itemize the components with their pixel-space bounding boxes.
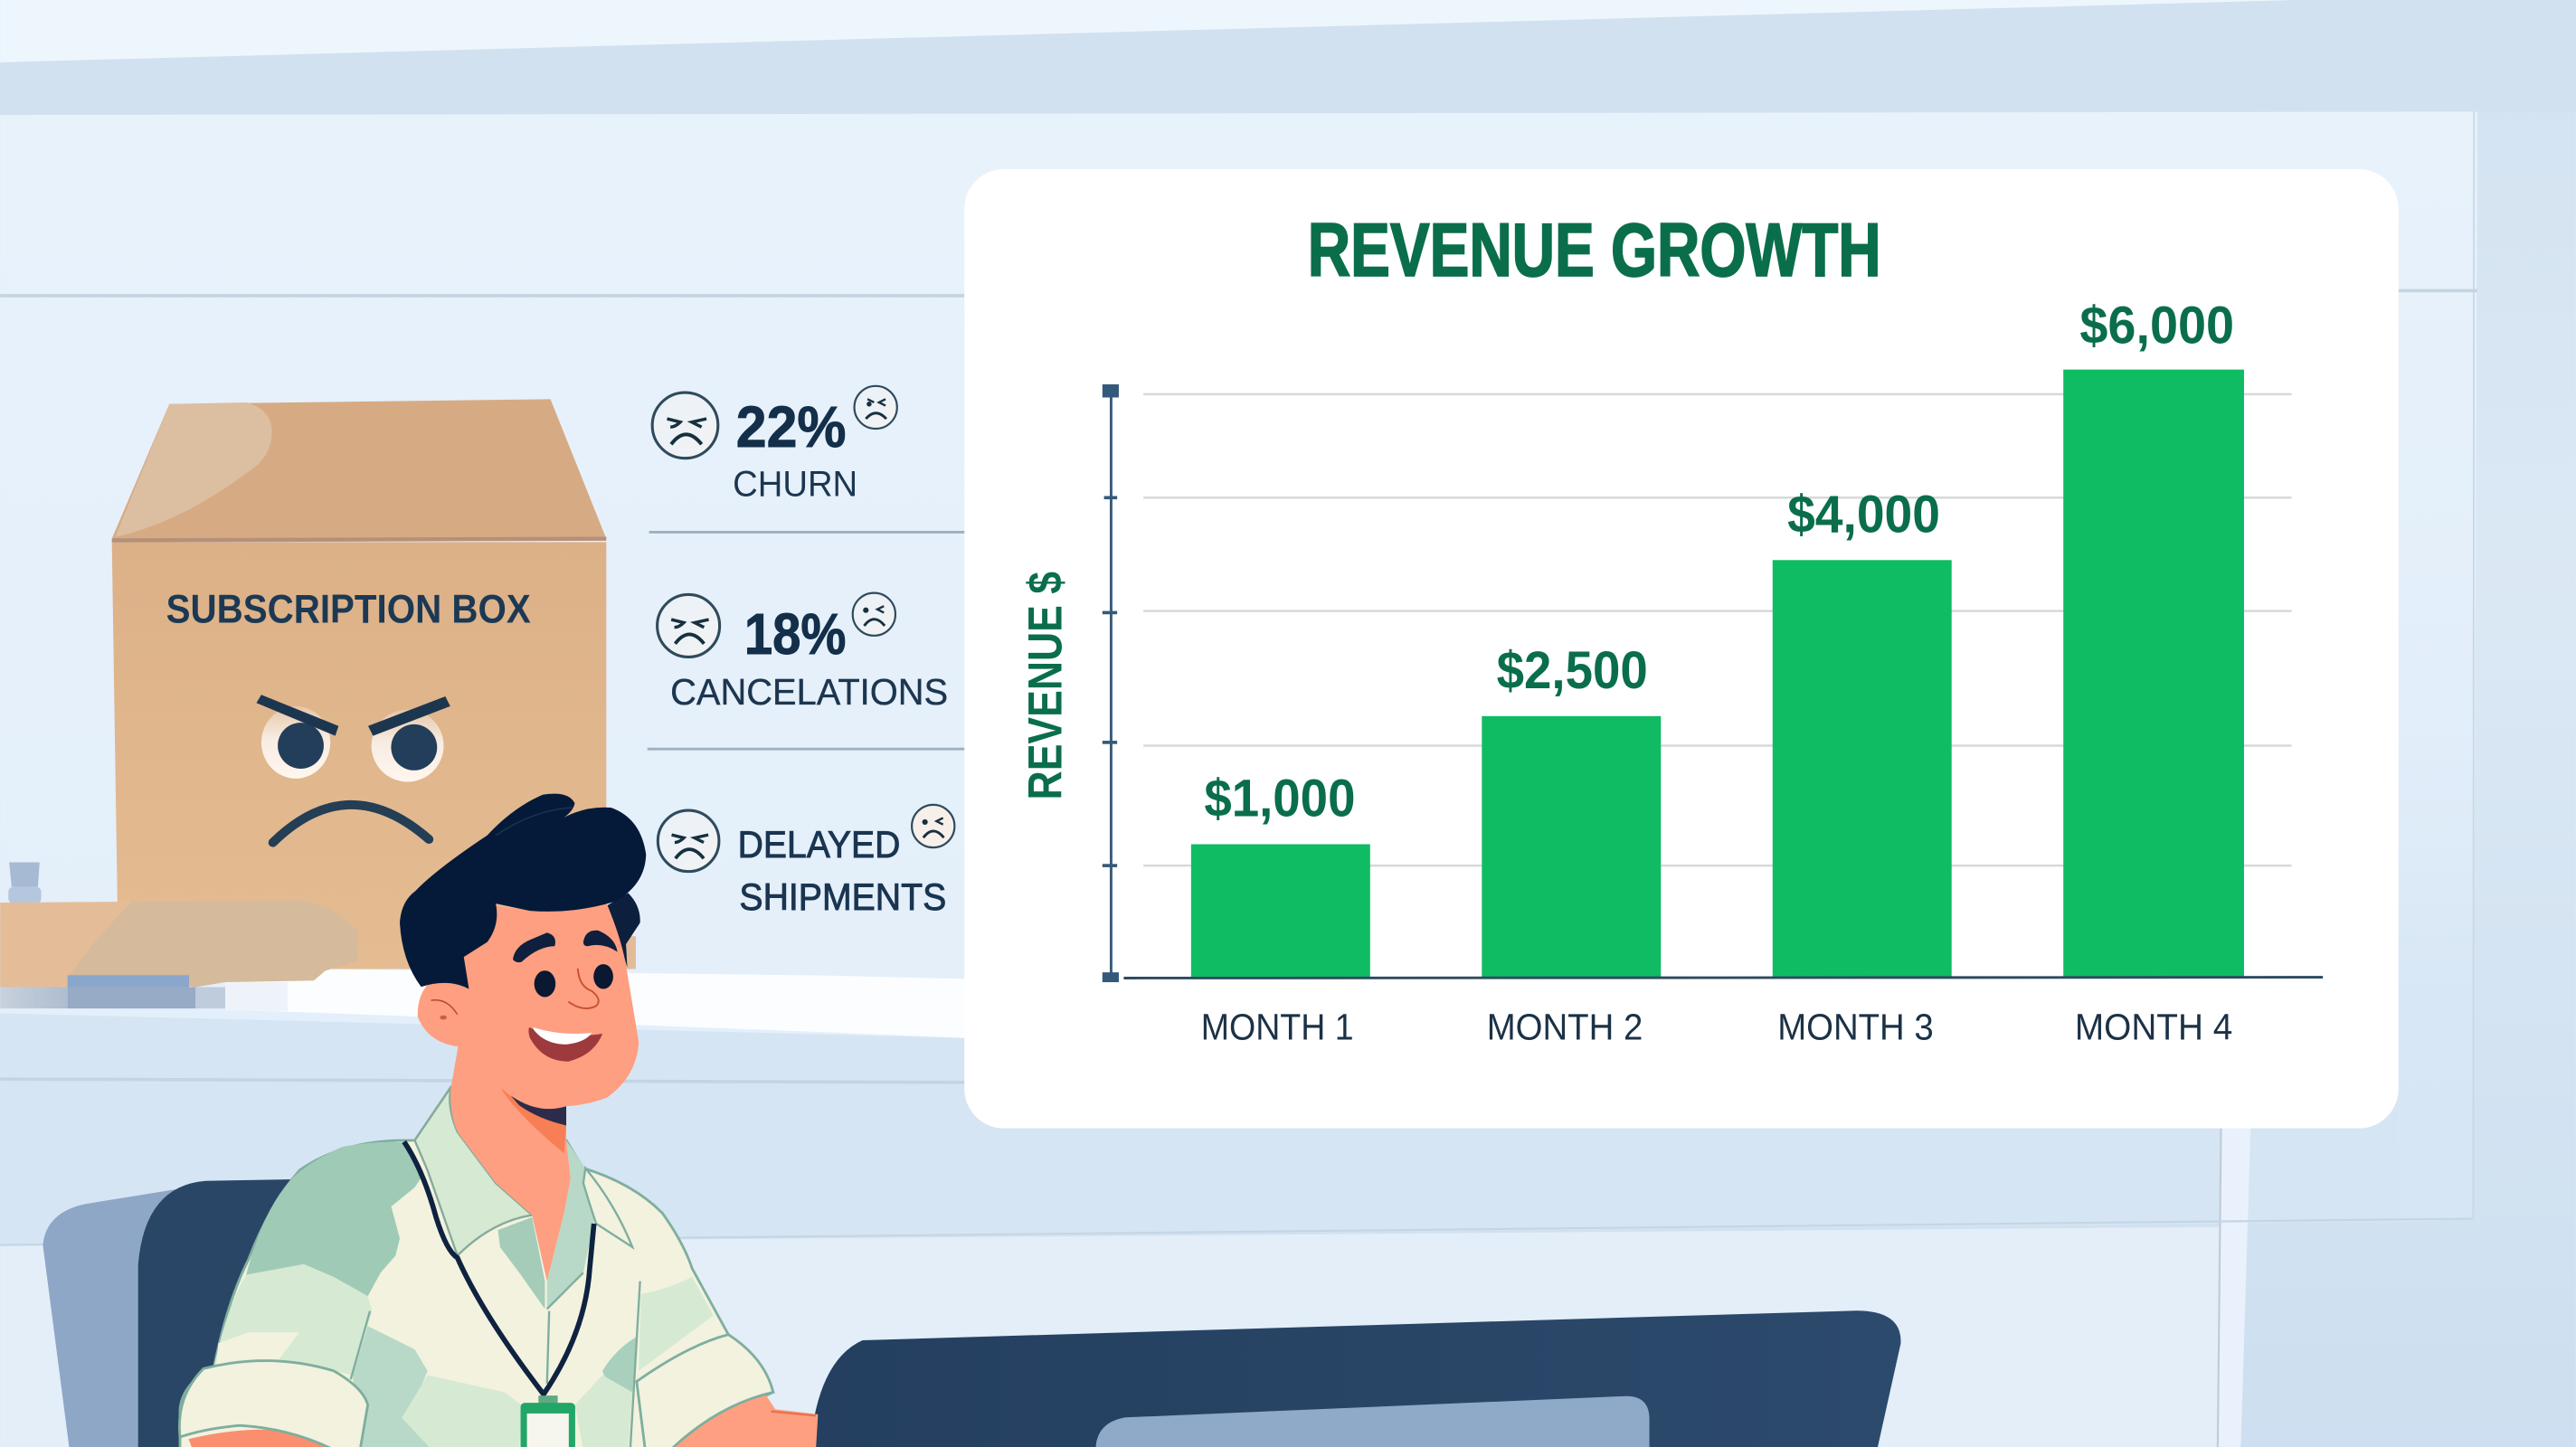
panel: revenue growth chart bbox=[964, 169, 2399, 1129]
lanyard bbox=[404, 1141, 594, 1395]
shirt camo patches bbox=[214, 1142, 714, 1447]
icon: sad face bbox=[658, 594, 720, 657]
arms bbox=[188, 1390, 818, 1447]
value labels: $1,000 bbox=[1204, 770, 1355, 828]
monitor stand bbox=[1096, 1396, 1650, 1447]
complaint stats bbox=[648, 386, 966, 918]
month labels: MONTH 2 bbox=[1487, 1007, 1643, 1048]
bar: month 2 bbox=[1482, 716, 1661, 978]
cancelations label: CANCELATIONS bbox=[670, 671, 948, 713]
delayed shipments label: SHIPMENTS bbox=[739, 875, 946, 918]
month labels: MONTH 3 bbox=[1777, 1007, 1934, 1048]
chart title: REVENUE GROWTH bbox=[1308, 207, 1881, 292]
inner v placket bbox=[547, 1140, 594, 1309]
hair back bbox=[607, 893, 640, 968]
y axis title: REVENUE $ bbox=[1018, 572, 1072, 799]
icon: sad face bbox=[652, 392, 718, 459]
box top flap bbox=[112, 399, 606, 539]
placket lines bbox=[351, 1272, 640, 1447]
blue blocks bbox=[0, 975, 288, 1011]
icon: small sad face bbox=[853, 593, 895, 636]
hair bbox=[400, 794, 646, 988]
left collar bbox=[415, 1087, 532, 1255]
icon: sad face bbox=[658, 810, 719, 872]
y axis bbox=[1103, 384, 1119, 982]
mouth bbox=[528, 1027, 602, 1062]
stat: churn bbox=[652, 386, 897, 504]
box body bbox=[112, 542, 606, 969]
id badge bbox=[521, 1395, 575, 1447]
icon: small sad face bbox=[912, 805, 954, 847]
month labels: MONTH 1 bbox=[1201, 1007, 1354, 1048]
churn label: CHURN bbox=[733, 464, 857, 504]
neck bbox=[450, 1051, 571, 1281]
flap highlight bbox=[115, 402, 272, 537]
angry box face bbox=[256, 695, 450, 843]
bar: month 1 bbox=[1191, 844, 1370, 978]
value labels: $2,500 bbox=[1497, 641, 1648, 700]
shirt bbox=[180, 1087, 773, 1447]
subscription box bbox=[112, 399, 636, 969]
bottle bbox=[8, 862, 42, 903]
value labels: $4,000 bbox=[1787, 485, 1940, 544]
eyes bbox=[535, 964, 613, 997]
month labels: MONTH 4 bbox=[2075, 1007, 2232, 1048]
right collar bbox=[583, 1168, 632, 1247]
sleeve cuffs bbox=[179, 1335, 773, 1447]
bar chart bbox=[1103, 297, 2323, 1048]
shelf items bbox=[0, 862, 358, 1011]
tan package bbox=[0, 900, 358, 987]
ear bbox=[418, 981, 470, 1046]
eyebrows bbox=[513, 932, 555, 962]
stat: cancelations bbox=[658, 593, 948, 713]
delayed shipments label: DELAYED bbox=[738, 823, 900, 865]
character: smiling man bbox=[179, 794, 818, 1447]
value labels bbox=[1204, 297, 2234, 828]
monitor bbox=[810, 1310, 1900, 1447]
value labels: $6,000 bbox=[2079, 297, 2234, 355]
18% value: 18% bbox=[744, 602, 846, 667]
icon: small sad face bbox=[855, 386, 897, 429]
head bbox=[458, 903, 639, 1106]
22% value: 22% bbox=[736, 395, 846, 459]
bar: month 4 bbox=[2063, 370, 2244, 978]
chair bbox=[43, 1179, 296, 1447]
nose bbox=[568, 969, 599, 1008]
stat: delayed shipments bbox=[658, 805, 954, 918]
bar: month 3 bbox=[1773, 560, 1952, 978]
month labels bbox=[1201, 1007, 2232, 1048]
box label: SUBSCRIPTION BOX bbox=[166, 587, 531, 631]
